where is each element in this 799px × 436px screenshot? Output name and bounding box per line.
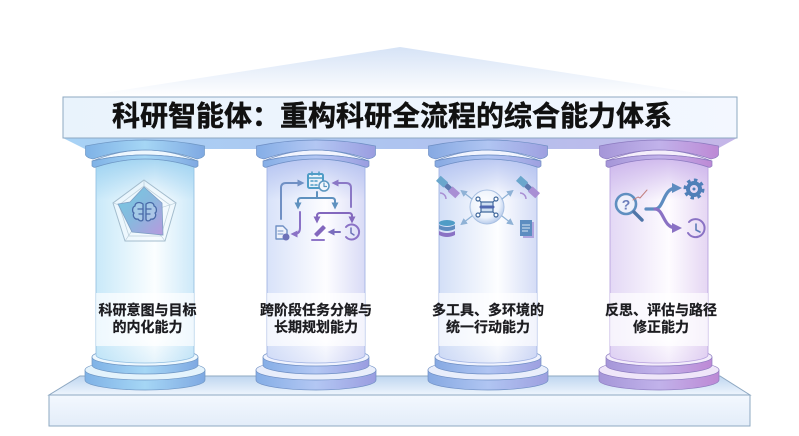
pillar 2 label band [267,293,365,346]
pillar 3 label: 统一行动能力 [446,319,530,335]
plinth base [49,376,750,426]
icon: documents [520,220,534,238]
pillar 3 capital [428,140,548,167]
question mark: ? [622,196,630,212]
icon: task planning flow [276,172,359,240]
icon: multi-tool hub [436,176,540,238]
pillar 4 shaft [610,159,708,363]
icon: database [439,220,455,237]
pediment roof [78,47,722,97]
pillar 1 label: 的内化能力 [112,319,182,335]
pillar 2 label: 长期规划能力 [274,319,358,335]
pillar 1 label: 科研意图与目标 [98,302,196,318]
pillar 2 base [256,348,376,390]
pillar 4 label band [610,293,708,346]
pillar 2 capital [256,140,376,167]
pillar 4 label: 反思、评估与路径 [605,302,717,318]
icon: satellite right [516,176,540,199]
pillar 2 shaft [267,159,365,363]
pillar 4 base [599,348,719,390]
entablature beam [63,97,737,149]
icon: reflect and correct [616,180,705,237]
pillar 1 shaft [96,159,194,363]
pillar 2 label: 跨阶段任务分解与 [260,302,372,318]
pillar 1 label band [96,293,194,346]
pillar 3 label band [439,293,537,346]
pillar 4 capital [600,140,718,167]
pillar 3 shaft [439,159,537,363]
pillar 3 label: 多工具、多环境的 [432,302,544,318]
pillar 1 [85,140,205,390]
pillar 2 [256,140,376,390]
pillar 4 label: 修正能力 [633,319,689,335]
pillar 3 base [428,348,548,390]
pillar 1 base [85,348,205,390]
icon: satellite left [436,176,460,199]
title: 科研智能体：重构科研全流程的综合能力体系 [112,100,672,132]
icon: radar pentagon with brain [113,180,176,241]
pillar 4 [599,140,719,390]
pillar 3 [428,140,548,390]
pillar 1 capital [86,140,204,167]
